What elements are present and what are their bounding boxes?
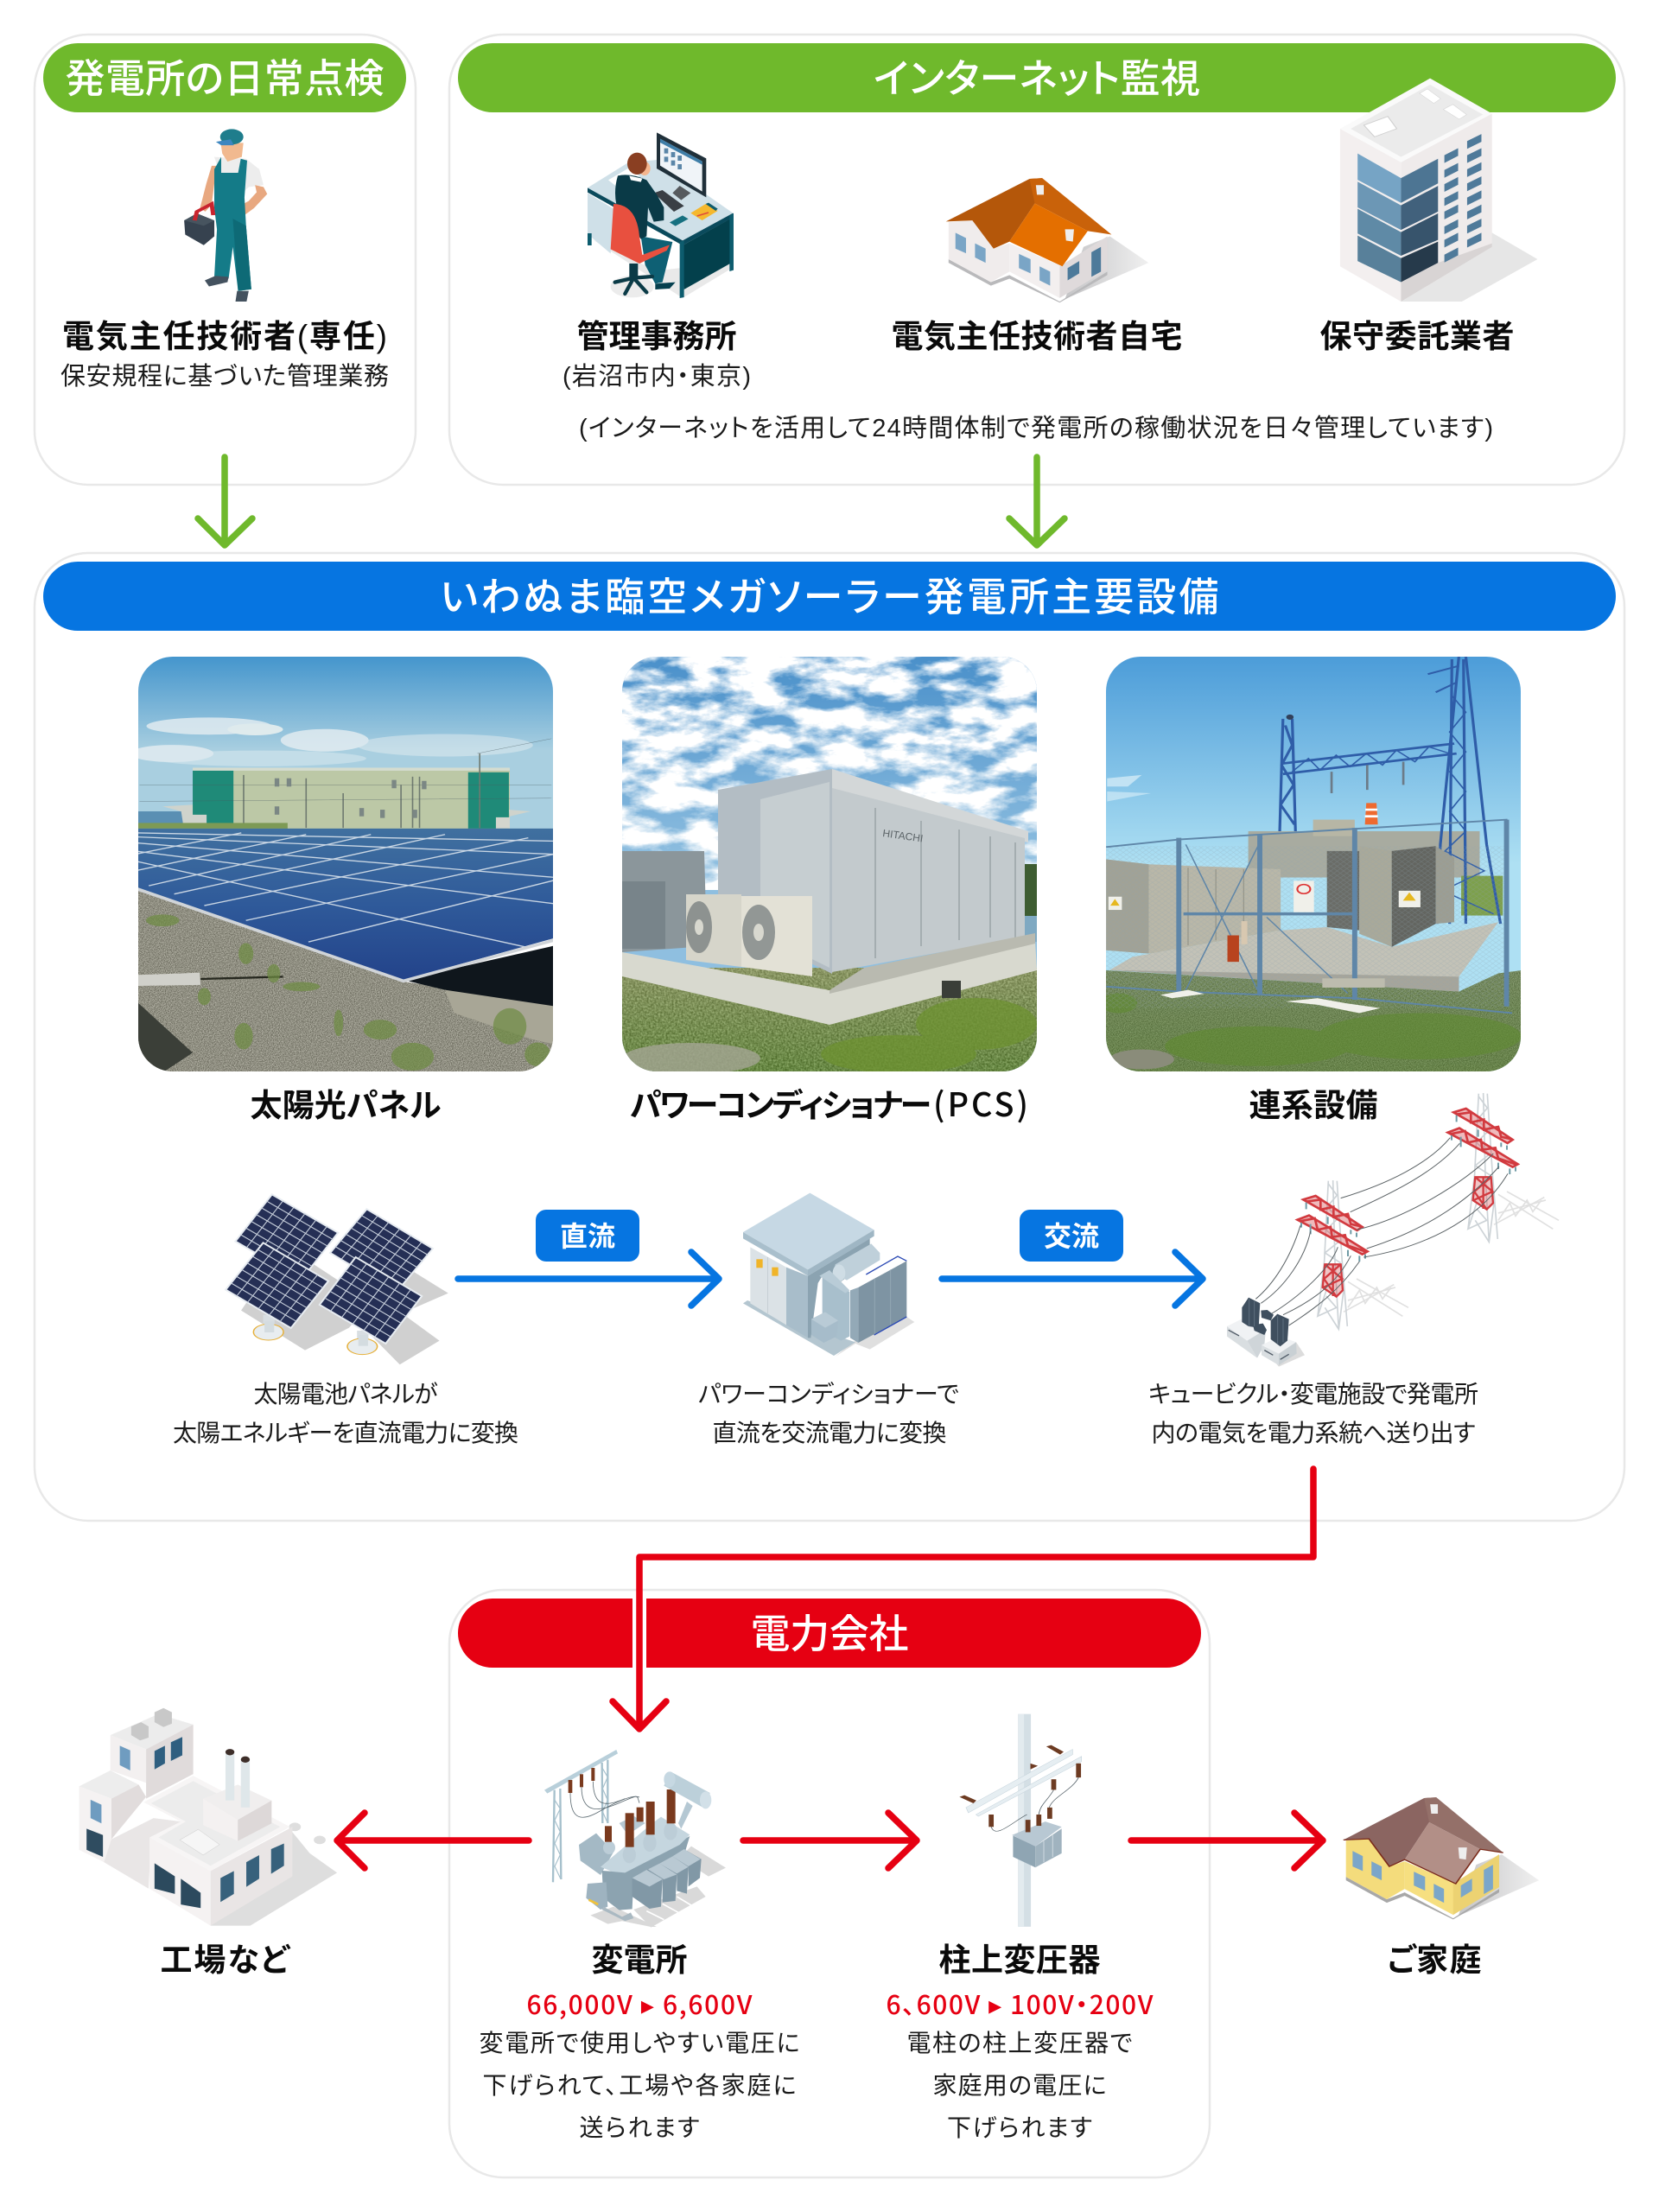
text: solar step description [173,1381,518,1446]
label: power conditioner: (PCS) [933,1078,1028,1126]
icon: power conditioner unit [743,1193,914,1357]
icon: transmission towers and cubicle [1227,1093,1559,1367]
text: pole transformer description [907,2030,1132,2141]
panel: main plant equipment [35,553,1624,1521]
arrow: substation to pole transformer [743,1813,917,1868]
heading: internet monitoring [458,43,1616,112]
heading: main plant equipment: いわぬま臨空メガソーラー発電所主要設備 [441,575,1218,620]
text: solar step description: 太陽電池パネルが [254,1381,438,1408]
icon: factory [79,1708,337,1926]
icon: family home [1344,1797,1539,1919]
heading: power company: 電力会社 [750,1611,909,1656]
text: substation description: 変電所で使用しやすい電圧に [479,2030,800,2056]
heading: main plant equipment [43,562,1616,631]
icon: maintenance worker [184,129,267,302]
text: office locations: (岩沼市内・東京) [563,362,751,391]
photo: power conditioner [622,657,1037,1074]
arrow: alternating current flow [942,1210,1203,1306]
text: solar step description: 太陽エネルギーを直流電力に変換 [173,1420,518,1446]
panel: internet monitoring [449,35,1624,485]
label: pole transformer: 柱上変圧器 [938,1942,1101,1978]
badge: direct current: 直流 [560,1221,615,1252]
panel: daily inspection [35,35,416,485]
label: grid connection facility: 連系設備 [1249,1088,1377,1123]
heading: power company [458,1599,1201,1668]
label: homes: ご家庭 [1388,1942,1481,1978]
icon: engineer house [946,178,1148,302]
text: grid step description: キュービクル・変電施設で発電所 [1148,1381,1478,1408]
label: management office: 管理事務所 [577,319,736,354]
text: substation description [479,2030,800,2141]
icon: substation transformer [544,1750,726,1928]
label: power conditioner: パワーコンディショナー [630,1087,931,1123]
panel: power company [449,1590,1210,2177]
badge: direct current [536,1210,639,1262]
badge: alternating current: 交流 [1044,1221,1099,1252]
photo: solar panels [130,652,556,1072]
text: management duties: 保安規程に基づいた管理業務 [60,362,389,391]
text: monitoring note: (インターネットを活用して24時間体制で発電所の稼働状況を日々管理しています) [579,414,1493,442]
text: pole transformer description: 下げられます [947,2114,1092,2141]
text: substation description: 下げられて、工場や各家庭に [482,2072,797,2099]
arrow: inspection to plant [198,457,252,545]
text: substation description: 送られます [579,2114,700,2141]
arrow: plant to substation [613,1469,1313,1729]
heading: internet monitoring: インターネット監視 [874,56,1200,101]
label: factories: 工場など [161,1942,291,1978]
text: substation voltage: 66,000V ▸ 6,600V [527,1984,753,2022]
icon: pole transformer [959,1714,1082,1927]
text: pole transformer voltage: 6、600V ▸ 100V・200V [887,1984,1154,2022]
arrow: direct current flow [458,1210,719,1306]
text: conditioner step description: パワーコンディショナーで [698,1381,959,1408]
photo: grid connection facility [1100,652,1523,1076]
label: power conditioner [630,1078,1028,1126]
arrow: pole transformer to home [1131,1813,1323,1868]
text: grid step description [1148,1381,1478,1446]
icon: management office desk [588,132,734,298]
label: solar panels: 太陽光パネル [251,1088,441,1123]
heading: daily inspection: 発電所の日常点検 [66,56,384,101]
text: conditioner step description: 直流を交流電力に変換 [712,1420,947,1446]
text: pole transformer description: 家庭用の電圧に [933,2072,1106,2099]
label: chief electrical engineer: 電気主任技術者(専任) [62,319,387,354]
arrow: to factory [337,1813,529,1868]
badge: alternating current [1020,1210,1123,1262]
label: engineer home: 電気主任技術者自宅 [892,319,1182,354]
text: conditioner step description [698,1381,959,1446]
label: substation: 変電所 [591,1942,688,1978]
text: pole transformer description: 電柱の柱上変圧器で [907,2030,1132,2056]
icon: contractor office building [1340,79,1537,302]
text: grid step description: 内の電気を電力系統へ送り出す [1151,1420,1476,1446]
label: maintenance contractor: 保守委託業者 [1320,319,1514,354]
icon: solar arrays [226,1194,448,1364]
heading: daily inspection [43,43,406,112]
photo: power conditioner: HITACHI [882,827,924,845]
arrow: monitoring to plant [1009,457,1065,545]
